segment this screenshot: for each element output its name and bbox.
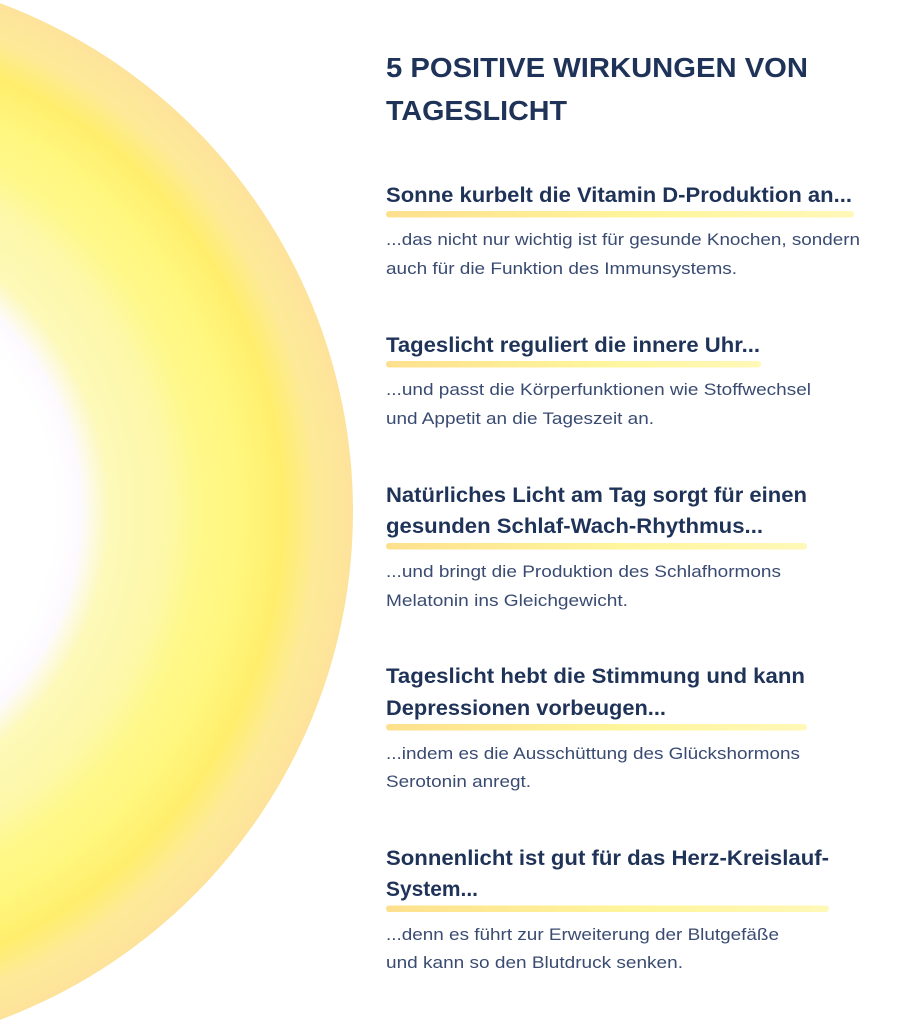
heading: Schlaf-Wach-Rhythmus (386, 484, 807, 538)
text: Herz-Kreislauf: und kann so den Blutdruck senken. (386, 953, 683, 972)
text: Stimmung (386, 744, 800, 791)
text: Stimmung: Serotonin anregt. (386, 772, 531, 791)
title: TAGESLICHT (386, 95, 567, 126)
sun circle (0, 0, 353, 1024)
text: Stimmung: ...indem es die Ausschüttung des Glückshormons (386, 744, 800, 763)
text: Vitamin D: ...das nicht nur wichtig ist für gesunde Knochen, sondern (386, 230, 860, 249)
underline bar: Stimmung (386, 724, 807, 730)
panel: Vitamin D (386, 184, 860, 278)
underline bar: Vitamin D (386, 211, 854, 218)
heading: Herz-Kreislauf: Sonnenlicht ist gut für das Herz-Kreislauf- (386, 847, 829, 870)
panel: Herz-Kreislauf (386, 847, 829, 972)
underline bar: innere Uhr (386, 361, 761, 368)
text: Schlaf-Wach-Rhythmus: ...und bringt die Produktion des Schlafhormons (386, 562, 781, 581)
text: Schlaf-Wach-Rhythmus: Melatonin ins Gleichgewicht. (386, 591, 628, 610)
title (386, 52, 808, 126)
heading: Vitamin D: Sonne kurbelt die Vitamin D-Produktion an... (386, 184, 852, 207)
heading: Stimmung: Tageslicht hebt die Stimmung und kann (386, 665, 805, 688)
heading: Herz-Kreislauf (386, 847, 829, 901)
underline bar: Herz-Kreislauf (386, 906, 829, 912)
heading: Stimmung: Depressionen vorbeugen... (386, 697, 666, 720)
panel: Schlaf-Wach-Rhythmus (386, 484, 807, 610)
text: innere Uhr: und Appetit an die Tageszeit an. (386, 409, 654, 428)
text: innere Uhr (386, 380, 811, 428)
panel: Stimmung (386, 665, 807, 791)
panel: innere Uhr (386, 334, 811, 428)
heading: Schlaf-Wach-Rhythmus: Natürliches Licht am Tag sorgt für einen (386, 484, 807, 507)
heading: innere Uhr: Tageslicht reguliert die innere Uhr... (386, 334, 760, 357)
heading: Stimmung (386, 665, 805, 720)
title: 5 POSITIVE WIRKUNGEN VON (386, 52, 808, 83)
text: Herz-Kreislauf: ...denn es führt zur Erweiterung der Blutgefäße (386, 925, 779, 944)
text: Herz-Kreislauf (386, 925, 779, 972)
heading: Schlaf-Wach-Rhythmus: gesunden Schlaf-Wach-Rhythmus... (386, 515, 763, 538)
text: innere Uhr: ...und passt die Körperfunktionen wie Stoffwechsel (386, 380, 811, 399)
text: Vitamin D: auch für die Funktion des Immunsystems. (386, 259, 737, 278)
text: Schlaf-Wach-Rhythmus (386, 562, 781, 610)
heading: Herz-Kreislauf: System... (386, 878, 478, 901)
underline bar: Schlaf-Wach-Rhythmus (386, 543, 807, 550)
text: Vitamin D (386, 230, 860, 278)
